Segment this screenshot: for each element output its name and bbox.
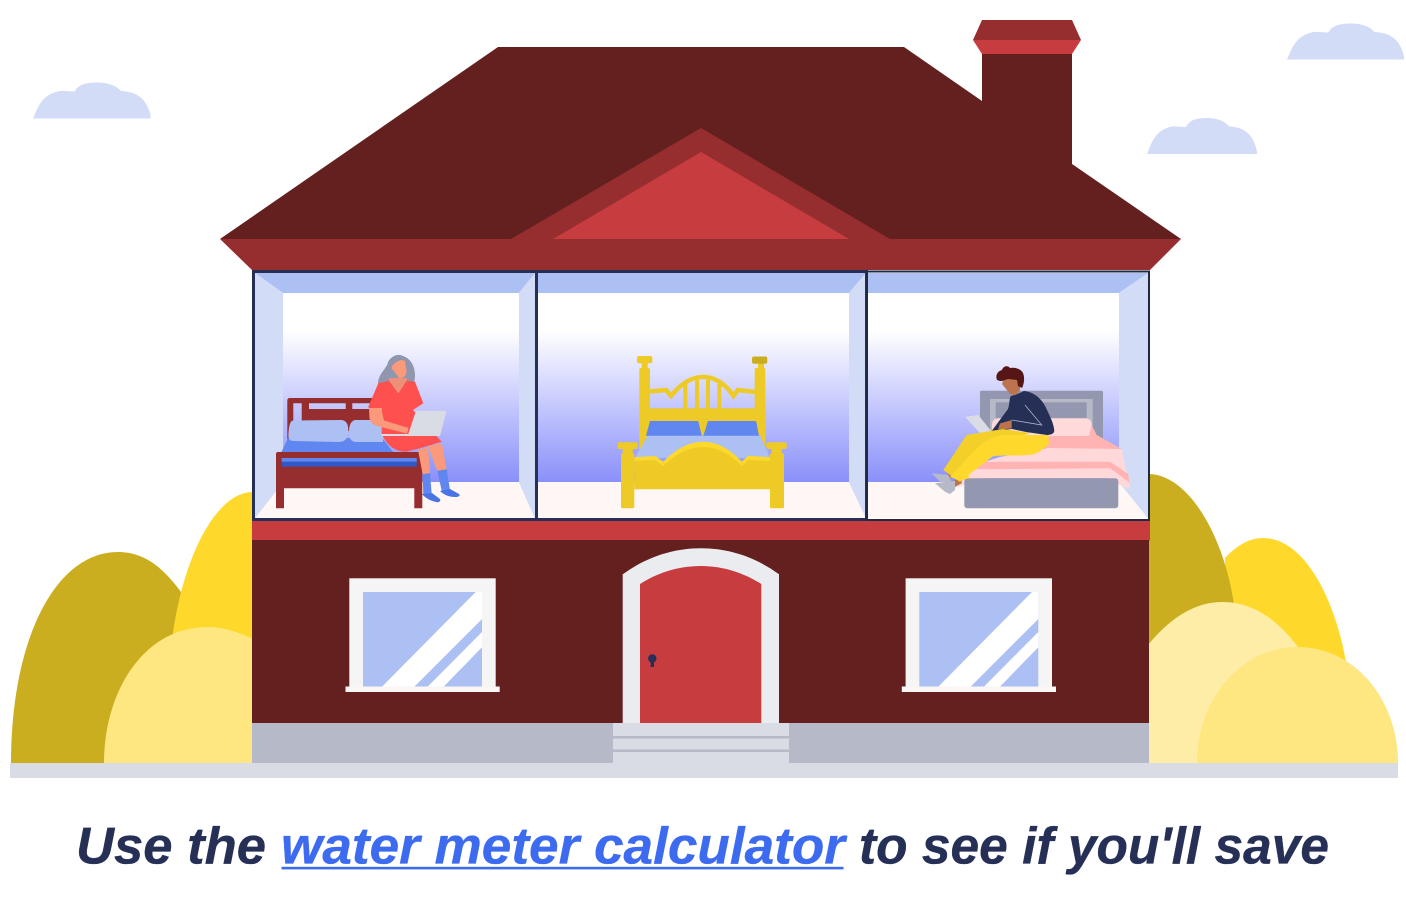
window: left	[346, 578, 500, 692]
bushes: right	[1148, 474, 1398, 763]
upper floor rooms	[255, 273, 1148, 518]
chimney cap	[973, 20, 1081, 54]
cloud: top right	[1287, 24, 1404, 60]
room frames	[254, 272, 1149, 520]
ground strip	[10, 763, 1398, 778]
bed: pink with grey headboard	[957, 391, 1130, 508]
caption	[76, 818, 1329, 876]
caption: to see if you'll save	[859, 818, 1329, 876]
caption: water meter calculator	[281, 818, 848, 876]
lower wall	[252, 540, 1149, 723]
floor band	[252, 521, 1150, 540]
cloud: near chimney	[1147, 118, 1257, 154]
foundation	[252, 723, 1149, 763]
roof	[220, 47, 1181, 270]
person: woman with laptop	[368, 355, 460, 502]
front steps	[613, 723, 789, 763]
window: right	[902, 578, 1056, 692]
bed: yellow wooden	[618, 356, 787, 508]
cloud: top left	[33, 82, 151, 118]
door	[623, 548, 779, 723]
person: man with laptop	[932, 366, 1054, 494]
bed: red with blue bedding	[276, 398, 422, 508]
bushes: left	[11, 492, 253, 763]
caption: Use the	[76, 818, 266, 876]
